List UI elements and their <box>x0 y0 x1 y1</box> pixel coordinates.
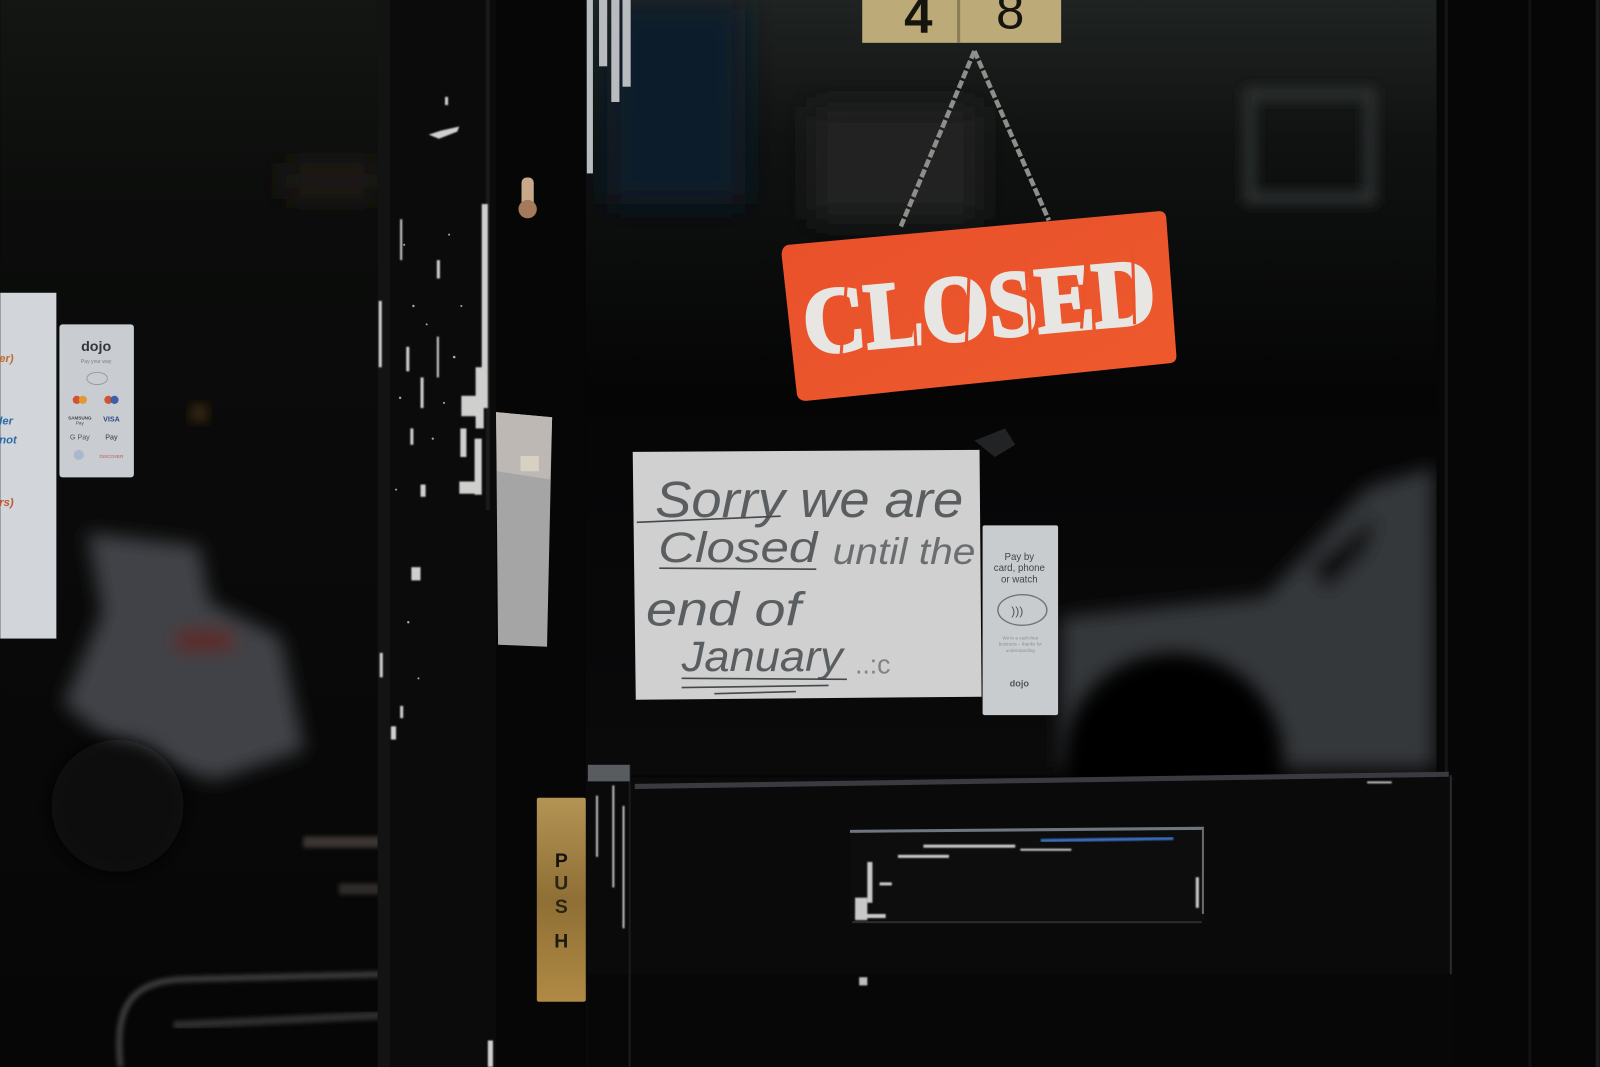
dojo payment sticker, left: VISA <box>103 415 120 423</box>
brass push plate <box>537 798 586 1002</box>
dojo contactless card sticker: card, phone <box>994 563 1045 574</box>
dojo contactless card sticker <box>983 525 1058 715</box>
dojo contactless card sticker: Pay by <box>1005 552 1034 563</box>
wind chime tubes <box>587 0 631 173</box>
dojo contactless card sticker: business – thanks for <box>999 642 1042 647</box>
dojo payment sticker, left: Pay your way <box>81 359 112 365</box>
glass door pane with reflections <box>586 0 1439 867</box>
dojo contactless card sticker: dojo <box>1010 679 1029 689</box>
right door stile <box>1437 0 1600 1067</box>
chipped white paint <box>379 97 493 1067</box>
handwritten paper note: ..:c <box>855 649 890 679</box>
paper notice, left edge <box>0 293 56 639</box>
dojo contactless card sticker: ))) <box>1011 604 1023 618</box>
lower door panel <box>586 765 1455 1067</box>
dojo contactless card sticker: understanding <box>1006 648 1035 653</box>
dojo payment sticker, left: SAMSUNG <box>68 415 92 420</box>
door latch <box>518 177 537 218</box>
orange closed sign <box>782 211 1176 401</box>
handwritten paper note: Sorry we are <box>655 471 963 528</box>
dojo payment sticker, left: Pay <box>76 420 84 425</box>
dojo payment sticker, left: DISCOVER <box>99 454 124 459</box>
sign text: CLOSED: CLOSED <box>799 239 1160 375</box>
brass push plate: S <box>555 896 568 918</box>
door frame post <box>378 0 584 1067</box>
door number plate <box>862 0 1061 44</box>
reflected car, right <box>1061 467 1433 767</box>
dojo payment sticker, left <box>59 324 134 477</box>
hanging chain <box>900 51 1049 228</box>
brass push plate: H <box>554 931 568 953</box>
dojo payment sticker, left: G Pay <box>70 434 90 442</box>
handwritten paper note: until the <box>833 531 975 572</box>
handwritten paper note: January <box>681 633 846 681</box>
letterbox <box>850 828 1205 922</box>
dojo contactless card sticker: or watch <box>1001 574 1038 585</box>
handwritten paper note: Closed <box>658 524 819 572</box>
tape on door edge <box>496 412 552 647</box>
dojo payment sticker, left: dojo <box>81 339 111 355</box>
dojo contactless card sticker: We're a cash-free <box>1002 636 1039 641</box>
fine paint speckle <box>395 234 462 679</box>
suction hook <box>974 428 1015 457</box>
brass push plate: P <box>555 850 568 872</box>
brass push plate: U <box>554 873 568 895</box>
dojo payment sticker, left: Pay <box>105 434 118 442</box>
stencil breaks in letters <box>841 250 1135 359</box>
handwritten paper note: end of <box>646 583 807 635</box>
handwritten paper note <box>633 450 982 700</box>
blurred reflected car, left <box>64 532 304 780</box>
left window background <box>0 0 388 1067</box>
